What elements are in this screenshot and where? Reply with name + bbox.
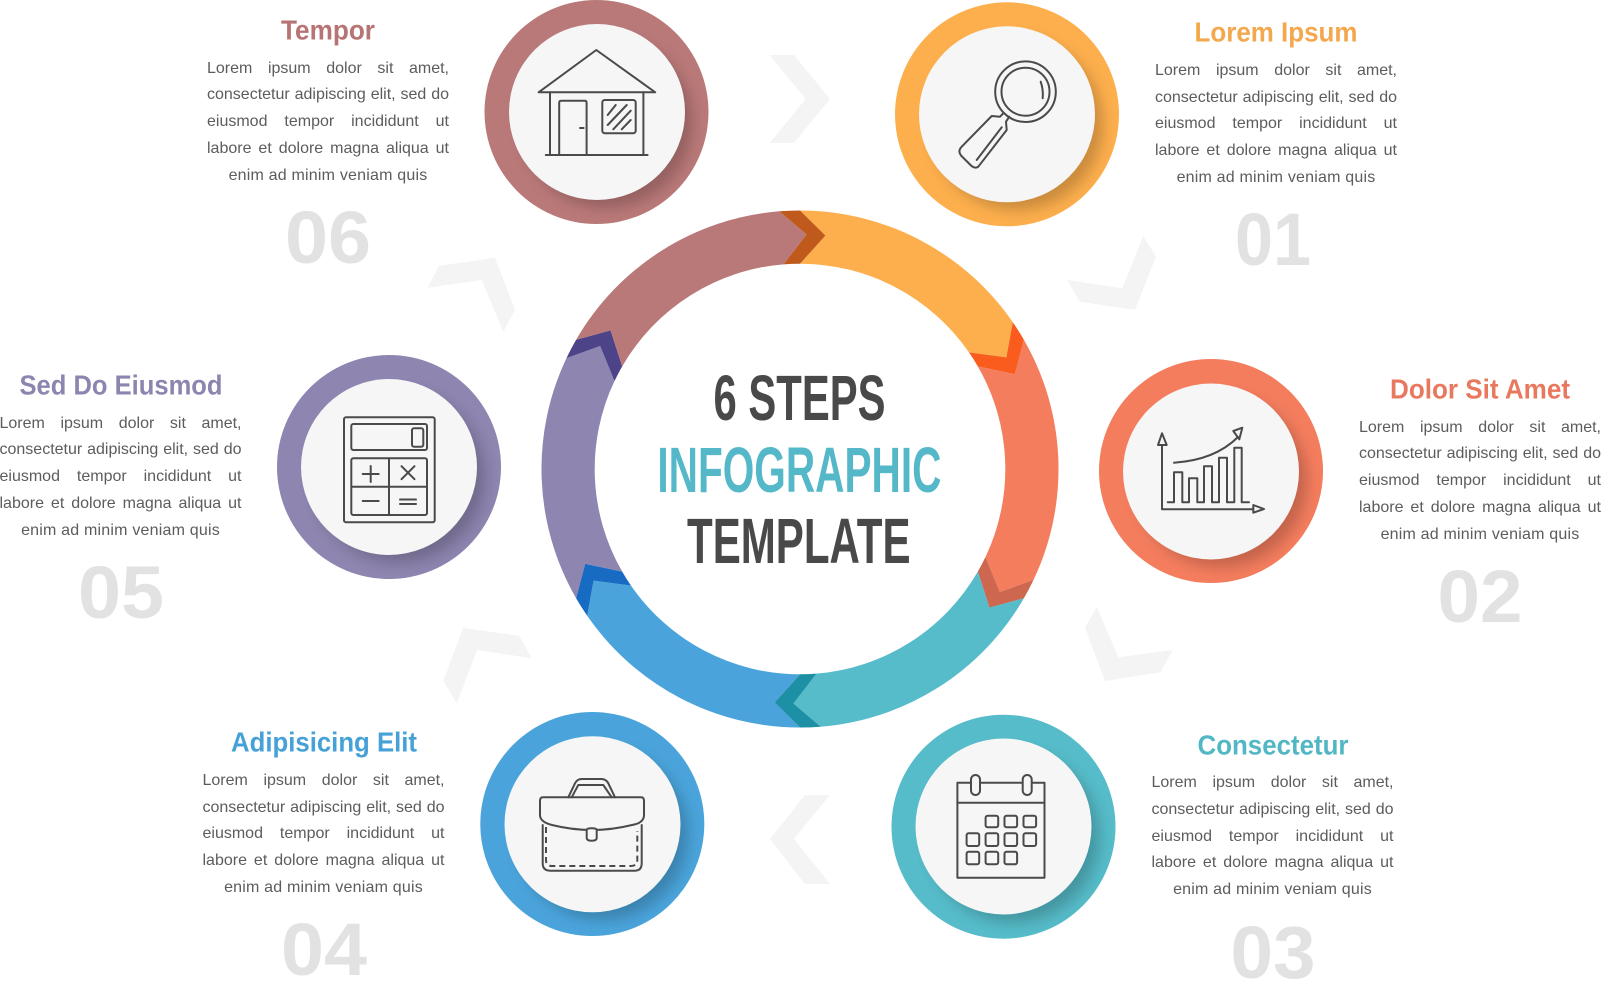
central ring of six arrows xyxy=(464,146,1136,792)
panel: step 01 text xyxy=(1155,17,1397,281)
panel: step 03 text xyxy=(1152,729,1394,987)
step 05 circle xyxy=(277,355,501,579)
arrow: chevron 6 to 1 xyxy=(770,55,830,143)
panel: step 01 text: consectetur adipiscing elit, sed do xyxy=(1155,89,1397,106)
icon: magnifying glass xyxy=(959,61,1056,168)
icon: calendar xyxy=(957,775,1044,878)
panel: step 06 text: eiusmod tempor incididunt ut xyxy=(207,113,449,130)
panel: step 06 text xyxy=(207,14,449,279)
step 01 circle xyxy=(895,2,1119,226)
panel: step 05 text: eiusmod tempor incididunt ut xyxy=(0,468,242,485)
panel: step 04 text xyxy=(202,727,444,987)
panel: step 02 text: consectetur adipiscing elit, sed do xyxy=(1359,445,1601,462)
title xyxy=(657,362,941,577)
arrow: chevron 2 to 3 xyxy=(1085,607,1173,681)
ring segment: red xyxy=(882,340,1136,616)
panel: step 06 text: Tempor xyxy=(281,14,375,45)
arrow: chevron 3 to 4 xyxy=(770,795,830,884)
panel: step 05 text: 05 xyxy=(78,551,164,634)
panel: step 02 text: labore et dolore magna aliqua ut xyxy=(1359,499,1601,516)
panel: step 04 text: consectetur adipiscing elit, sed do xyxy=(202,799,444,816)
panel: step 02 text: enim ad minim veniam quis xyxy=(1381,526,1579,543)
panel: step 01 text: Lorem Ipsum xyxy=(1194,17,1358,48)
panel: step 06 text: labore et dolore magna aliqua ut xyxy=(207,140,449,157)
panel: step 03 text: Consectetur xyxy=(1197,729,1348,760)
panel: step 03 text: eiusmod tempor incididunt ut xyxy=(1152,828,1394,845)
step 04 circle xyxy=(480,712,704,936)
panel: step 04 text: labore et dolore magna aliqua ut xyxy=(202,852,444,869)
panel: step 01 text: eiusmod tempor incididunt ut xyxy=(1155,115,1397,132)
panel: step 05 text: Sed Do Eiusmod xyxy=(19,369,222,400)
ring segment: purple xyxy=(464,322,718,598)
panel: step 01 text: Lorem ipsum dolor sit amet, xyxy=(1155,62,1397,79)
title: TEMPLATE xyxy=(687,505,910,577)
panel: step 01 text: labore et dolore magna aliqua ut xyxy=(1155,142,1397,159)
ring segment: rose xyxy=(576,146,830,422)
panel: step 06 text: enim ad minim veniam quis xyxy=(229,167,427,184)
panel: step 05 text: labore et dolore magna aliqua ut xyxy=(0,495,242,512)
panel: step 04 text: eiusmod tempor incididunt ut xyxy=(202,825,444,842)
arrow: chevron 5 to 6 xyxy=(428,258,515,332)
icon: bar chart xyxy=(1158,428,1264,513)
panel: step 04 text: enim ad minim veniam quis xyxy=(224,879,423,896)
panel: step 04 text: Lorem ipsum dolor sit amet, xyxy=(202,772,444,789)
panel: step 06 text: 06 xyxy=(285,196,371,279)
ring segment: teal xyxy=(770,516,1024,792)
icon: house xyxy=(539,50,655,155)
panel: step 05 text xyxy=(0,369,242,634)
title: 6 STEPS xyxy=(714,362,886,434)
panel: step 03 text: enim ad minim veniam quis xyxy=(1173,881,1372,898)
panel: step 03 text: consectetur adipiscing elit, sed do xyxy=(1152,801,1394,818)
arrow: chevron 4 to 5 xyxy=(443,628,532,703)
panel: step 05 text: Lorem ipsum dolor sit amet, xyxy=(0,414,242,432)
panel: step 04 text: Adipisicing Elit xyxy=(230,727,416,758)
step 03 circle xyxy=(892,715,1116,939)
panel: step 05 text: consectetur adipiscing elit, sed do xyxy=(0,441,242,458)
icon: briefcase xyxy=(540,779,644,871)
panel: step 06 text: Lorem ipsum dolor sit amet, xyxy=(207,60,449,76)
panel: step 01 text: enim ad minim veniam quis xyxy=(1177,169,1375,186)
panel: step 01 text: 01 xyxy=(1235,198,1311,281)
panel: step 03 text: Lorem ipsum dolor sit amet, xyxy=(1152,774,1394,791)
step 06 circle xyxy=(484,0,708,224)
step 02 circle xyxy=(1099,359,1323,583)
main graphic xyxy=(277,0,1323,939)
ring segment: orange xyxy=(800,210,1024,374)
icon: calculator xyxy=(344,417,435,522)
panel: step 05 text: enim ad minim veniam quis xyxy=(21,522,220,539)
ring segment: blue xyxy=(576,564,800,728)
panel: step 02 text: Dolor Sit Amet xyxy=(1390,373,1570,404)
arrow: chevron 1 to 2 xyxy=(1067,236,1156,310)
panel: step 03 text: labore et dolore magna aliqua ut xyxy=(1152,854,1394,871)
panel: step 02 text: Lorem ipsum dolor sit amet, xyxy=(1359,418,1601,436)
panel: step 02 text xyxy=(1359,373,1601,638)
panel: step 02 text: 02 xyxy=(1438,555,1522,638)
panel: step 06 text: consectetur adipiscing elit, sed do xyxy=(207,86,449,103)
panel: step 02 text: eiusmod tempor incididunt ut xyxy=(1359,472,1601,489)
title: INFOGRAPHIC xyxy=(657,434,941,506)
